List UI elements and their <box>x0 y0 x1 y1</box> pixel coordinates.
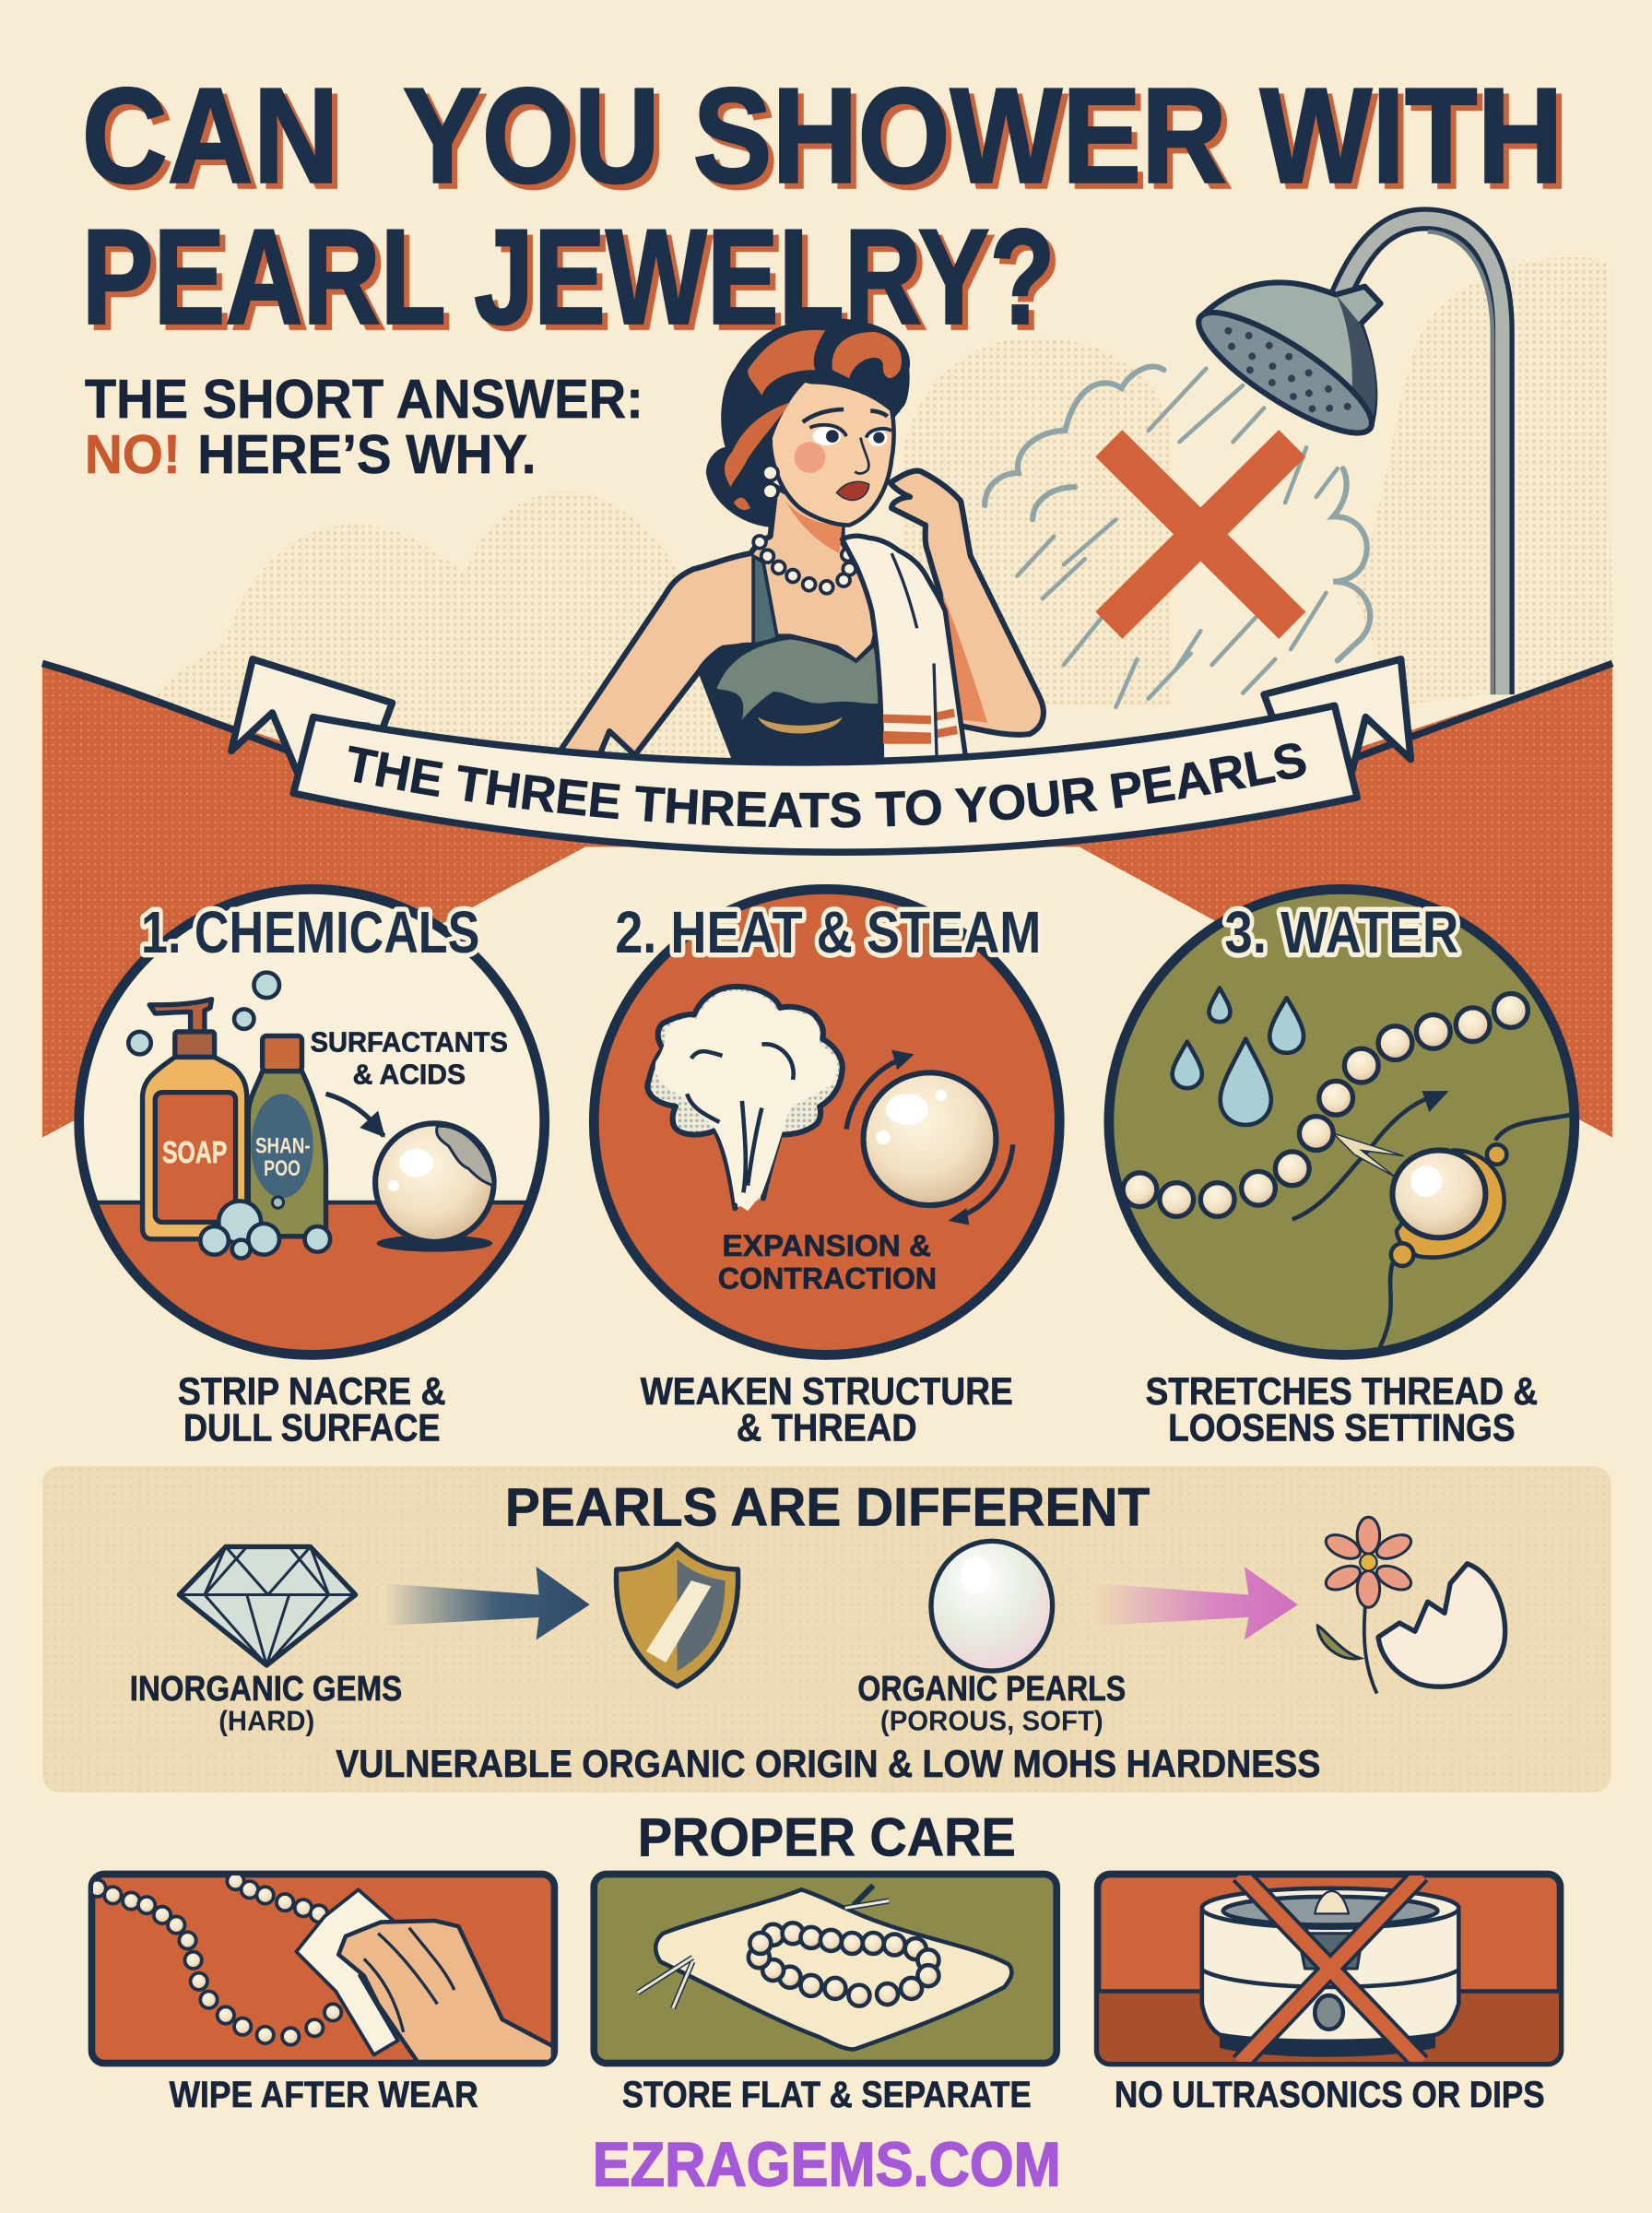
orange band <box>42 663 1612 1138</box>
hair front <box>725 330 902 510</box>
threat 2: heat and steam <box>594 889 1059 1355</box>
cloth <box>296 1889 398 2054</box>
arrow to pearl <box>326 1094 385 1138</box>
face <box>771 375 894 526</box>
ribbon banner <box>228 656 1414 856</box>
threat captions: DULL SURFACE <box>183 1407 440 1450</box>
thread <box>1380 1115 1570 1348</box>
expansion arrows <box>846 1050 1013 1225</box>
threat captions: STRIP NACRE & <box>178 1370 446 1413</box>
threat captions: STRETCHES THREAD & <box>1146 1370 1538 1413</box>
label: organic pearls: (POROUS, SOFT) <box>880 1705 1103 1736</box>
label: organic pearls <box>857 1669 1126 1736</box>
pouch <box>655 1889 1011 2049</box>
steam cloud <box>647 987 843 1211</box>
title: PEARL JEWELRY? <box>82 202 1056 353</box>
hair back <box>708 321 908 526</box>
threat captions: WEAKEN STRUCTURE <box>641 1370 1013 1413</box>
shampoo label: SHAN- <box>255 1134 311 1159</box>
threat 1: chemicals <box>71 882 550 1362</box>
halftone clouds behind hero <box>120 257 1612 846</box>
soap bottle <box>143 1000 247 1239</box>
drawstring highlight <box>638 1901 889 2008</box>
label: organic pearls: ORGANIC PEARLS <box>857 1669 1126 1709</box>
threat headings: 2. HEAT & STEAM <box>615 899 1041 965</box>
label: inorganic gems: (HARD) <box>218 1705 314 1736</box>
icon: diamond <box>179 1546 356 1665</box>
label: surfactants: SURFACTANTS <box>311 1026 508 1058</box>
panel: pearls are different <box>42 1466 1611 1793</box>
threat captions: & THREAD <box>737 1407 917 1450</box>
circle 1 <box>84 894 525 1350</box>
damaged pearl <box>375 1123 494 1252</box>
strap <box>753 556 777 646</box>
ultrasonic cleaner <box>1202 1888 1458 2054</box>
pearl strand <box>88 1873 341 2045</box>
threat headings <box>141 899 1458 965</box>
threat headings: 1. CHEMICALS <box>141 899 479 965</box>
face features <box>795 409 891 500</box>
steam cloud and water streaks <box>985 367 1370 707</box>
arm shading <box>942 593 987 723</box>
caption: store: STORE FLAT & SEPARATE <box>622 2075 1032 2115</box>
stretch arrow <box>1292 1091 1449 1219</box>
arrow: hard <box>384 1567 590 1639</box>
card: no ultrasonics <box>1098 1874 1561 2064</box>
ribbon text: THE THREE THREATS TO YOUR PEARLS <box>348 743 1306 828</box>
threat 3: water <box>1109 889 1575 1355</box>
red X <box>1109 444 1292 625</box>
threat captions: LOOSENS SETTINGS <box>1168 1407 1516 1450</box>
clasp pearl <box>1391 1144 1506 1266</box>
bracelet <box>749 1923 938 2006</box>
expansion label: EXPANSION & <box>723 1229 931 1262</box>
circle 3 <box>1109 889 1575 1355</box>
circle 2 <box>594 889 1059 1355</box>
pearl strand <box>1123 994 1528 1216</box>
threat captions <box>178 1370 1538 1450</box>
threat headings: 3. WATER <box>1224 899 1458 965</box>
label: surfactants <box>311 1026 508 1091</box>
short answer: THE SHORT ANSWER: <box>85 368 643 430</box>
footer url: EZRAGEMS.COM <box>593 2131 1061 2200</box>
label: surfactants: & ACIDS <box>353 1059 466 1091</box>
title <box>82 61 1564 353</box>
icon: shower <box>1185 219 1503 694</box>
shampoo bottle <box>248 1035 326 1237</box>
card: store flat <box>594 1874 1056 2064</box>
suds and bubbles <box>128 973 330 1259</box>
caption: wipe: WIPE AFTER WEAR <box>170 2075 478 2115</box>
proper care heading: PROPER CARE <box>638 1808 1016 1868</box>
label: inorganic gems <box>130 1669 402 1736</box>
no symbol <box>1240 1874 1421 2064</box>
short answer: HERE’S WHY. <box>197 423 537 485</box>
hand <box>338 1921 553 2062</box>
short answer <box>85 368 643 485</box>
caption: no ultrasonics: NO ULTRASONICS OR DIPS <box>1115 2075 1545 2115</box>
shampoo label: POO <box>264 1156 301 1181</box>
icon: organic pearl <box>931 1541 1053 1671</box>
woman <box>557 321 1044 763</box>
short answer: NO! <box>85 423 181 485</box>
ribbon tails <box>231 659 392 790</box>
expansion label: CONTRACTION <box>718 1261 937 1295</box>
neck shadow <box>785 501 843 553</box>
arrow: soft <box>1093 1567 1298 1639</box>
right arm and hand <box>891 471 1044 735</box>
soap label: SOAP <box>162 1136 227 1170</box>
expansion label <box>718 1229 937 1295</box>
icon: flower <box>1317 1517 1415 1694</box>
summary line: VULNERABLE ORGANIC ORIGIN & LOW MOHS HARDNESS <box>336 1743 1320 1785</box>
label: inorganic gems: INORGANIC GEMS <box>130 1669 402 1709</box>
ribbon body <box>293 705 1357 852</box>
heading: PEARLS ARE DIFFERENT <box>505 1478 1150 1538</box>
necklace <box>753 536 856 594</box>
frayed thread <box>1333 1133 1404 1178</box>
dress <box>700 636 881 763</box>
card: wipe after wear <box>88 1873 554 2064</box>
shampoo label <box>255 1134 311 1181</box>
icon: shield <box>616 1544 738 1686</box>
water drops <box>1173 988 1304 1125</box>
neck and left arm <box>557 487 881 755</box>
towel <box>843 536 966 763</box>
earring <box>762 465 778 499</box>
pearl 2 <box>864 1072 996 1205</box>
drawstring <box>638 1886 889 2008</box>
icon: eggshell <box>1378 1564 1505 1686</box>
